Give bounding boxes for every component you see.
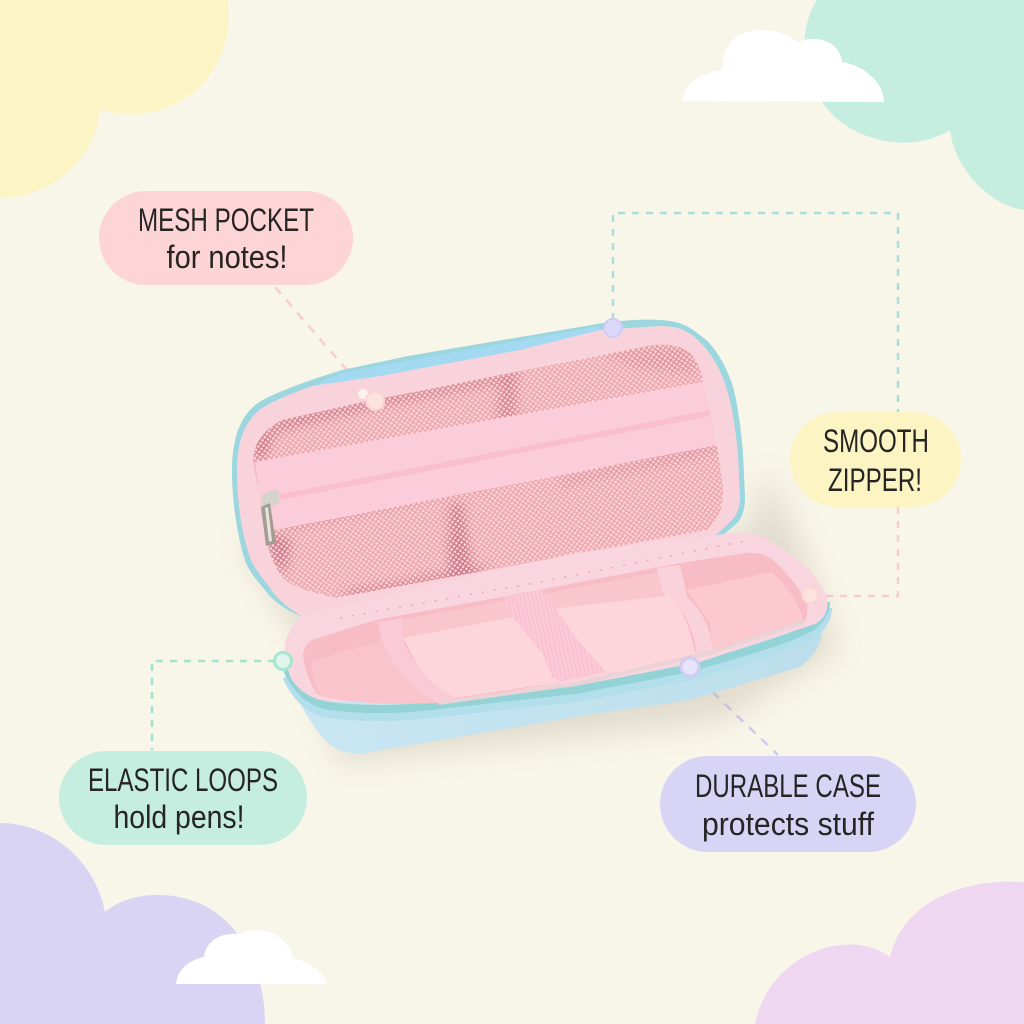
pencil case illustration [232,320,838,762]
tray zipper [287,602,826,709]
left elastic loop [378,618,455,703]
marker: mesh pocket [358,389,384,410]
tray shell [285,610,822,753]
marker: elastic mint [274,652,292,670]
cloud: lilac bottom left [0,823,265,1024]
back wall center [402,572,673,638]
tray back wall [303,553,807,704]
callout: elastic loops [59,751,307,845]
callout: mesh pocket: MESH POCKET [138,202,314,238]
connector: elastic loops [152,661,275,750]
marker: zipper peach [802,587,818,603]
mesh net [253,344,723,598]
lid zipper edge [232,320,745,617]
cloud: yellow top left [0,0,229,198]
callout: mesh pocket [99,191,353,285]
tray zipper shadow band [288,608,826,715]
callout: durable case: protects stuff [702,806,874,842]
right elastic loop [657,565,713,657]
lid blue sliver [312,326,600,386]
case shadow [240,470,838,762]
callout: smooth zipper [790,412,961,507]
callout: elastic loops: hold pens! [114,799,244,835]
rim stitching [340,540,750,618]
upper lid [232,320,745,617]
connector: mesh pocket [275,287,352,376]
mesh shadows [250,345,715,600]
zipper pull [261,489,280,546]
marker: durable lilac [681,658,699,676]
pocket zipper [280,413,710,497]
marker: top lilac [604,319,622,337]
connector: top teal [613,213,898,412]
middle elastic loop [503,590,606,682]
cloud: white bottom left [176,931,327,984]
callout: elastic loops: ELASTIC LOOPS [88,762,278,798]
connector: zipper pink [826,507,898,596]
center panel [403,595,697,698]
callout: smooth zipper: SMOOTH [823,423,929,459]
cloud: orchid bottom right [755,882,1024,1024]
cloud: mint top right [804,0,1024,210]
lid pink rim [237,326,740,617]
tray floor right [686,572,803,650]
mesh panel [253,344,724,598]
callout: smooth zipper: ZIPPER! [828,462,922,498]
tray floor left [310,640,438,704]
callout: durable case [660,756,916,852]
front lip [438,622,803,703]
lower tray [285,533,827,753]
connector: durable case [700,680,778,755]
callout: mesh pocket: for notes! [166,239,288,275]
zipper band [255,382,717,530]
tray rim [285,533,827,702]
callout: durable case: DURABLE CASE [695,768,881,804]
cloud: white top right [683,30,884,102]
